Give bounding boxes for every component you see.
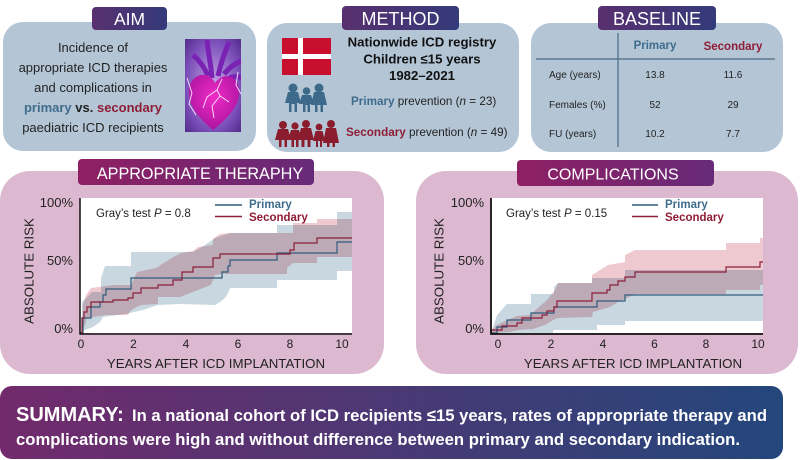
panel: aim	[3, 7, 256, 151]
panel: complications	[416, 160, 798, 374]
table: baseline characteristics: 29	[727, 100, 739, 111]
legend	[215, 199, 308, 224]
table: baseline characteristics: Females (%)	[549, 100, 606, 111]
y axis title: ABSOLUTE RISK	[432, 218, 446, 324]
y axis labels: 50%	[47, 253, 73, 268]
heading: appropriate therapy: APPROPRIATE THERAPHY	[97, 165, 303, 183]
text: aim description: and complications in	[34, 80, 152, 95]
table: baseline characteristics: 10.2	[645, 129, 665, 140]
legend	[632, 199, 724, 224]
heading: complications	[517, 160, 714, 186]
table: baseline characteristics: Primary	[634, 40, 677, 52]
legend: Primary	[249, 199, 292, 211]
table: baseline characteristics: Secondary	[704, 41, 763, 53]
y axis labels	[40, 195, 73, 336]
text: aim description: appropriate ICD therapies	[19, 60, 168, 75]
text: summary	[16, 404, 767, 449]
panel: baseline	[531, 6, 783, 152]
table: baseline characteristics	[536, 33, 775, 147]
x axis labels: 0	[78, 337, 85, 351]
text: primary prevention: Primary prevention (n = 23)	[351, 95, 496, 108]
heading: complications: COMPLICATIONS	[547, 166, 679, 184]
x axis labels: 6	[235, 337, 242, 351]
x axis labels: 2	[130, 337, 137, 351]
table: baseline characteristics: 7.7	[726, 129, 740, 140]
chart: appropriate therapy cumulative incidence	[22, 195, 352, 371]
x axis labels: 8	[703, 337, 710, 351]
heading: method: METHOD	[362, 9, 440, 29]
table: baseline characteristics: Age (years)	[549, 70, 601, 81]
text: aim description: Incidence of	[58, 40, 128, 55]
text: secondary prevention: Secondary prevention (n = 49)	[346, 126, 508, 139]
x axis labels: 2	[548, 337, 555, 351]
y axis labels: 50%	[458, 253, 484, 268]
x axis labels: 6	[651, 337, 658, 351]
x axis labels: 8	[287, 337, 294, 351]
heading: aim	[92, 7, 167, 30]
x axis labels: 4	[183, 337, 190, 351]
y axis title: ABSOLUTE RISK	[22, 218, 36, 324]
x axis title: YEARS AFTER ICD IMPLANTATION	[107, 356, 325, 371]
legend: Primary	[665, 199, 708, 211]
text: registry details: 1982–2021	[389, 68, 455, 83]
table: baseline characteristics: FU (years)	[549, 129, 596, 140]
text: aim description: primary vs. secondary	[24, 100, 163, 115]
table: baseline characteristics: 11.6	[724, 70, 743, 81]
text: gray's test: Gray’s test P = 0.8	[96, 208, 191, 220]
text: summary: SUMMARY:	[16, 404, 124, 426]
x axis labels: 10	[751, 337, 765, 351]
text: summary: complications were high and without difference between primary and secondary indication.	[16, 430, 740, 449]
legend: Secondary	[249, 212, 308, 224]
x axis labels	[495, 337, 765, 351]
x axis labels: 4	[600, 337, 607, 351]
panel: method	[267, 6, 519, 152]
text: gray's test: Gray’s test P = 0.15	[506, 208, 607, 220]
x axis labels: 0	[495, 337, 502, 351]
heading: method	[342, 6, 459, 30]
y axis labels: 100%	[40, 195, 73, 210]
icon: danish flag	[282, 38, 331, 75]
icon: secondary prevention children	[275, 120, 339, 147]
table: baseline characteristics: 13.8	[645, 70, 665, 81]
y axis labels: 0%	[465, 321, 484, 336]
heading: baseline: BASELINE	[613, 9, 701, 29]
table: baseline characteristics: 52	[649, 100, 661, 111]
legend: Secondary	[665, 212, 724, 224]
chart: complications cumulative incidence	[432, 195, 765, 371]
text: registry details: Nationwide ICD registry	[348, 34, 497, 50]
text: aim description: paediatric ICD recipients	[22, 120, 164, 135]
text: registry details: Children ≤15 years	[363, 52, 481, 66]
x axis title: YEARS AFTER ICD IMPLANTATION	[524, 356, 742, 371]
text: registry details	[348, 34, 497, 83]
y axis labels: 0%	[54, 321, 73, 336]
text: summary: In a national cohort of ICD recipients ≤15 years, rates of appropriate therapy and	[132, 406, 767, 425]
panel: summary	[0, 386, 783, 459]
heading: aim: AIM	[114, 9, 145, 29]
heading: baseline	[598, 6, 716, 30]
icon: primary prevention children	[285, 84, 327, 112]
y axis labels: 100%	[451, 195, 484, 210]
x axis labels: 10	[335, 337, 349, 351]
y axis labels	[451, 195, 484, 336]
x axis labels	[78, 337, 349, 351]
heading: appropriate therapy	[78, 159, 314, 185]
text: aim description	[19, 40, 168, 135]
icon: heart with lightning	[185, 39, 243, 132]
panel: appropriate therapy	[0, 159, 384, 374]
